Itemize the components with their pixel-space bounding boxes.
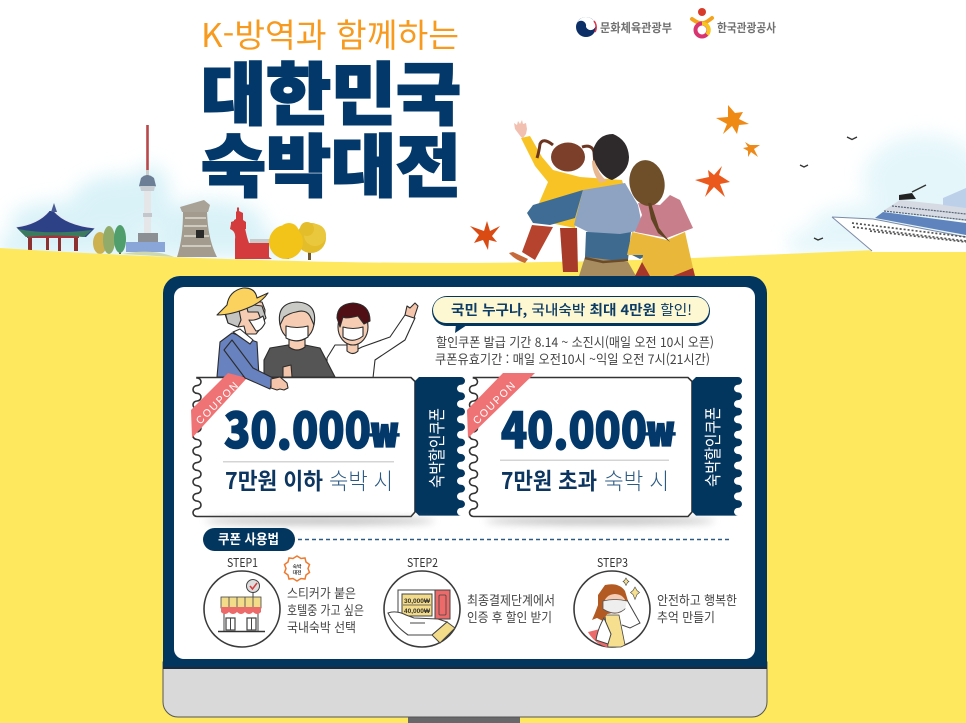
illustration: maple leaves: [470, 105, 760, 250]
mother: [626, 157, 695, 276]
step 2 text: [467, 590, 555, 626]
coupon 40,000 won: [467, 373, 742, 516]
stub label: 숙박할인쿠폰: [423, 408, 448, 488]
young man waving: [327, 303, 418, 378]
old man: [264, 302, 335, 377]
coupon dates text: 쿠폰유효기간 : 매일 오전10시 ~익일 오전 7시(21시간): [435, 349, 710, 368]
stub label: 숙박할인쿠폰: [699, 407, 724, 487]
coupon 40,000 won: 숙박 시: [604, 462, 669, 496]
illustration: family from behind: [509, 120, 695, 276]
white screen: [174, 287, 755, 659]
coupon 40,000 won: ₩: [646, 408, 675, 456]
coupon 30,000 won: 숙박 시: [329, 462, 393, 496]
step 3: STEP3: [597, 554, 628, 571]
step 3 text: 추억 만들기: [657, 607, 715, 626]
sticker badge: 숙박: [293, 563, 302, 570]
amount: 30.000: [224, 392, 371, 463]
condition: 7만원 초과: [501, 462, 597, 496]
landmark: N Seoul Tower: [122, 125, 174, 257]
speech bubble headline: [432, 296, 710, 333]
sticker badge: [284, 556, 310, 581]
logo: Ministry of Culture: 문화체육관광부: [600, 19, 672, 36]
main title: [201, 40, 461, 211]
step 1: STEP1: [227, 554, 258, 571]
logo: Ministry of Culture: [576, 17, 672, 37]
coupon ribbon: [191, 373, 247, 438]
landmark: ginkgo trees: [269, 222, 326, 260]
background sky washes: [0, 135, 966, 257]
illustration: seagulls: [800, 137, 857, 240]
ticket shadows: [205, 518, 715, 524]
yellow ground: [0, 246, 966, 723]
coupon 30,000 won: COUPON: [194, 379, 242, 427]
coupon 40,000 won: COUPON: [471, 379, 519, 427]
how to use heading: 쿠폰 사용법: [218, 528, 279, 548]
step 3 text: [657, 590, 737, 626]
icon: shop: [218, 580, 265, 632]
ticket stub: [415, 377, 465, 516]
landmark: pavilion: [16, 203, 95, 251]
title tagline: K-방역과 함께하는: [201, 9, 459, 57]
step 1 text: 호텔중 가고 싶은: [287, 600, 364, 619]
amount: 40.000: [501, 392, 647, 463]
ticket body: [470, 378, 692, 516]
monitor: [163, 276, 767, 723]
how to use heading: [203, 528, 729, 551]
icon: hand holding coupon: 30,000₩: [404, 598, 431, 605]
coupon 30,000 won: [191, 373, 465, 516]
coupon ribbon: [467, 373, 535, 438]
ticket stub: [692, 377, 742, 516]
grandmother with hat: [217, 288, 268, 377]
coupon 30,000 won: ₩: [370, 409, 399, 457]
sticker badge: 대전: [293, 569, 301, 576]
coupon dates text: [435, 332, 714, 368]
icon: hand holding coupon: 40,000₩: [404, 608, 431, 615]
speech bubble headline: 국민 누구나, 국내숙박 최대 4만원 할인!: [451, 300, 692, 320]
condition: 7만원 이하: [225, 462, 323, 496]
landmark: trees: [93, 225, 126, 254]
ticket body: [193, 378, 415, 516]
landmark: red horse lighthouse: [230, 207, 272, 259]
monitor bezel: [163, 662, 767, 717]
main title: 대한민국: [201, 40, 461, 139]
step 1: [204, 554, 364, 647]
landmark: Cheomseongdae: [177, 200, 217, 257]
coupon dates text: 할인쿠폰 발급 기간 8.14 ~ 소진시(매일 오전 10시 오픈): [436, 332, 714, 351]
illustration: three masked people: [217, 288, 418, 378]
step 3 text: 안전하고 행복한: [657, 590, 737, 609]
icon: hand holding coupon: [388, 590, 455, 643]
monitor stand: [408, 717, 520, 723]
step 1 text: [287, 583, 364, 636]
icon: woman in mask: [588, 578, 640, 647]
step 1 text: 스티커가 붙은: [287, 583, 356, 602]
step 2 text: 인증 후 할인 받기: [467, 607, 552, 626]
step 2: STEP2: [407, 554, 438, 571]
step 1 text: 국내숙박 선택: [287, 617, 356, 636]
logo: Korea Tourism Organization: 한국관광공사: [717, 19, 776, 36]
step 2 text: 최종결제단계에서: [467, 590, 555, 609]
logo: Korea Tourism Organization: [692, 8, 776, 36]
girl: [509, 120, 624, 272]
monitor screen frame: [163, 276, 767, 668]
step 3: [574, 554, 737, 647]
illustration: cruise ship: [832, 185, 966, 252]
step 2: [384, 554, 555, 647]
main title: 숙박대전: [201, 112, 461, 211]
father: [527, 134, 647, 276]
grandmother arm and hand over ticket: [224, 340, 288, 390]
